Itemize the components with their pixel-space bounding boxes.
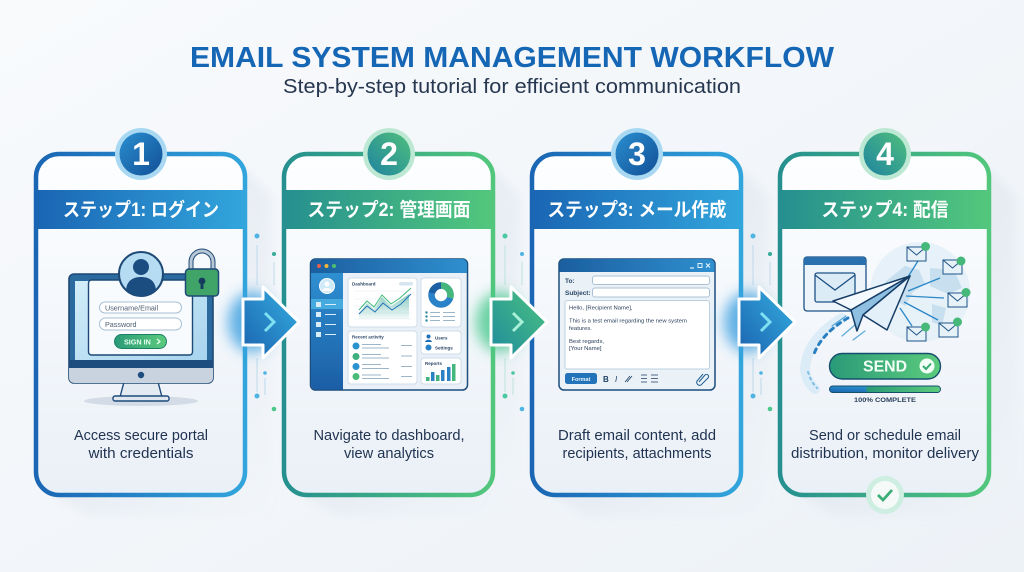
browser window with envelope [804,257,866,311]
icon: computer login screen [69,251,218,406]
step 3 header band [534,190,739,229]
panel: step 2 dashboard [284,128,520,516]
paper plane [833,276,910,331]
recipient field [565,276,710,285]
step 2 description [314,428,464,462]
password field: Password [105,320,137,329]
globe [870,242,970,342]
password field [100,318,182,330]
step 3 description: recipients, attachments [562,446,712,462]
chart panel [348,278,417,327]
subject field: Subject: [565,290,591,297]
step 4 description: Send or schedule email [809,428,961,444]
progress bar [830,386,940,392]
connector dots between steps 3 and 4 [750,234,772,411]
progress label: 100% COMPLETE [854,397,916,404]
step 1 number badge: 1 [132,136,150,172]
recipient field: To: [565,278,575,285]
connector dots between steps 1 and 2 [254,234,276,411]
step 3 description [558,428,716,462]
arrow: step 2 to step 3 [476,287,547,358]
step 2 description: view analytics [344,446,434,462]
motion trail [805,316,865,389]
panel: step 4 send [780,128,1016,516]
step 2 header band [286,190,491,229]
subject field [565,288,710,297]
email body: This is a test email regarding the new system [569,318,687,324]
send button: SEND [863,358,907,376]
step 3 description: Draft email content, add [558,428,716,444]
step 1 description: with credentials [87,446,194,462]
users and settings panel: Settings [435,346,453,350]
username field: Username/Email [105,304,159,312]
email body: features. [569,326,592,332]
step 3 header band: ステップ3: メール作成 [548,198,726,221]
icon: email compose window [559,259,715,390]
subtitle: Step-by-step tutorial for efficient communication [283,75,741,98]
send button [830,354,940,379]
formatting toolbar [565,373,709,385]
icon: paper plane sending emails [804,242,970,404]
step 1 number badge [115,128,167,180]
step 2 description: Navigate to dashboard, [314,428,464,444]
arrow: step 3 to step 4 [724,287,795,358]
chart panel: Dashboard [352,282,376,286]
step 3 number badge [611,128,663,180]
icon: dashboard window [310,259,468,390]
title: EMAIL SYSTEM MANAGEMENT WORKFLOW [190,42,835,74]
connector dots between steps 2 and 3 [502,234,524,411]
email body: [Your Name] [569,346,602,352]
email body [565,300,710,369]
reports panel [421,358,461,384]
completed check badge [866,476,904,514]
step 4 header band: ステップ4: 配信 [822,199,948,221]
step 1 description: Access secure portal [74,428,208,444]
recent activity panel: Recent activity [352,334,384,340]
formatting toolbar: B [603,375,609,384]
step 2 number badge: 2 [380,136,398,172]
sign in button [114,334,166,348]
icon: padlock [186,251,218,296]
formatting toolbar: Format [572,377,590,383]
username field [100,302,182,313]
arrow: step 1 to step 2 [228,287,299,358]
sign in button: SIGN IN [124,338,151,346]
step 3 number badge: 3 [628,136,646,172]
users and settings panel [421,331,461,354]
donut chart panel [421,278,461,327]
step 4 description [791,428,980,462]
step 1 header band [38,190,243,229]
email body: Hello, [Recipient Name], [569,306,633,312]
step 1 header band: ステップ1: ログイン [63,198,219,221]
step 2 header band: ステップ2: 管理画面 [308,198,470,221]
email body: Best regards, [569,339,604,345]
dashboard sidebar [311,273,343,390]
envelopes [907,247,967,341]
step 4 description: distribution, monitor delivery [791,446,980,462]
step 4 number badge: 4 [876,136,894,172]
formatting toolbar: I [615,375,618,384]
step 4 number badge [859,128,911,180]
icon: user avatar [119,252,163,296]
delivery arrows [900,261,944,326]
step 1 description [74,428,208,462]
step 4 header band [782,190,987,229]
users and settings panel: Users [435,336,448,340]
panel: step 3 compose [532,128,768,516]
panel: step 1 login [36,128,272,516]
step 2 number badge [363,128,415,180]
reports panel: Reports [425,361,442,366]
recent activity panel [348,331,417,384]
